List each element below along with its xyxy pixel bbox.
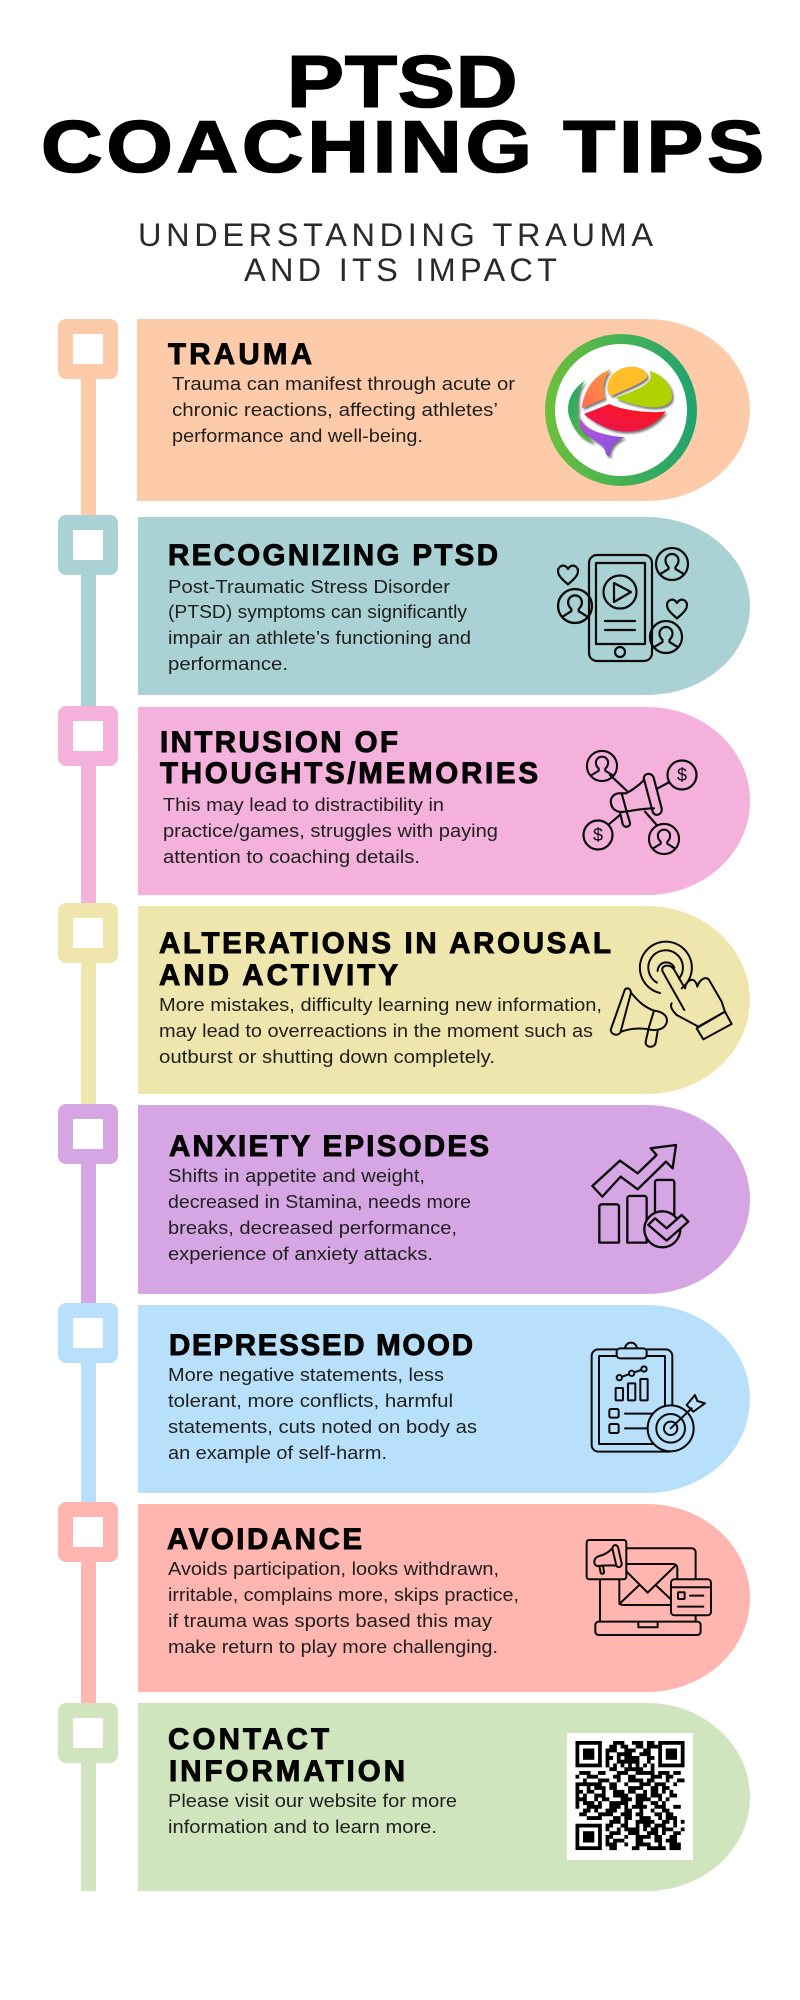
- panel: intrusion of thoughts: [138, 707, 750, 895]
- text: recognizing PTSD: [168, 576, 471, 674]
- timeline marker: arousal: [58, 903, 118, 1108]
- text: contact information: information and to learn more.: [168, 1816, 437, 1837]
- icon: megaphone network: $: [677, 765, 687, 785]
- text: intrusion of thoughts: practice/games, struggles with paying: [163, 820, 498, 841]
- title: COACHING TIPS: [41, 106, 764, 188]
- timeline marker: intrusion: [58, 706, 118, 907]
- heading: alterations in arousal: AND ACTIVITY: [159, 959, 398, 992]
- text: recognizing PTSD: performance.: [168, 653, 288, 674]
- timeline marker: anxiety: [58, 1104, 118, 1307]
- heading: alterations in arousal: [159, 927, 611, 992]
- text: anxiety episodes: [168, 1165, 471, 1264]
- text: alterations in arousal: may lead to overreactions in the moment such as: [159, 1020, 593, 1041]
- text: depressed mood: More negative statements, less: [168, 1364, 444, 1385]
- text: depressed mood: statements, cuts noted on body as: [168, 1416, 477, 1437]
- text: avoidance: irritable, complains more, skips practice,: [168, 1584, 519, 1605]
- panel: alterations in arousal: [138, 906, 750, 1094]
- text: alterations in arousal: [159, 994, 602, 1067]
- QR code: [567, 1733, 693, 1860]
- title: PTSD: [287, 41, 517, 123]
- panel: anxiety episodes: [138, 1105, 750, 1294]
- panel: recognizing PTSD: [138, 517, 750, 695]
- text: anxiety episodes: breaks, decreased performance,: [168, 1217, 457, 1238]
- text: intrusion of thoughts: [163, 794, 498, 867]
- icon: megaphone network: [584, 751, 696, 854]
- text: anxiety episodes: Shifts in appetite and weight,: [168, 1165, 425, 1186]
- timeline marker: trauma: [58, 319, 118, 520]
- text: recognizing PTSD: Post-Traumatic Stress Disorder: [168, 576, 450, 597]
- text: depressed mood: tolerant, more conflicts, harmful: [168, 1390, 453, 1411]
- icon: rising chart with check: [592, 1145, 688, 1247]
- panel: contact information: [138, 1703, 750, 1891]
- heading: alterations in arousal: ALTERATIONS IN AROUSAL: [159, 927, 611, 960]
- text: anxiety episodes: experience of anxiety attacks.: [168, 1243, 433, 1264]
- text: recognizing PTSD: impair an athlete’s functioning and: [168, 627, 471, 648]
- text: alterations in arousal: More mistakes, difficulty learning new information,: [159, 994, 602, 1015]
- text: trauma: chronic reactions, affecting athletes’: [172, 399, 498, 420]
- heading: avoidance: AVOIDANCE: [167, 1523, 362, 1556]
- heading: recognizing PTSD: RECOGNIZING PTSD: [168, 539, 498, 572]
- subtitle: UNDERSTANDING TRAUMA: [138, 217, 653, 253]
- text: recognizing PTSD: (PTSD) symptoms can significantly: [168, 601, 468, 622]
- panel: avoidance: [138, 1504, 750, 1692]
- heading: intrusion of thoughts: [160, 726, 538, 790]
- icon: phone with video and people: [558, 548, 688, 661]
- heading: intrusion of thoughts: THOUGHTS/MEMORIES: [160, 757, 538, 790]
- text: alterations in arousal: outburst or shutting down completely.: [159, 1046, 495, 1067]
- text: contact information: Please visit our website for more: [168, 1790, 457, 1811]
- icon: megaphone network: $: [593, 825, 603, 845]
- text: intrusion of thoughts: attention to coaching details.: [163, 846, 420, 867]
- text: trauma: performance and well-being.: [172, 425, 423, 446]
- text: intrusion of thoughts: This may lead to distractibility in: [163, 794, 444, 815]
- timeline marker: avoidance: [58, 1502, 118, 1706]
- timeline marker: contact: [58, 1703, 118, 1891]
- heading: trauma: TRAUMA: [168, 338, 312, 371]
- heading: depressed mood: DEPRESSED MOOD: [169, 1329, 473, 1362]
- panel: depressed mood: [138, 1305, 750, 1493]
- timeline: [58, 319, 118, 1891]
- icon: clipboard with target: [592, 1343, 705, 1452]
- heading: contact information: INFORMATION: [169, 1755, 405, 1788]
- text: depressed mood: [168, 1364, 477, 1463]
- text: trauma: Trauma can manifest through acute or: [172, 373, 515, 394]
- text: avoidance: Avoids participation, looks withdrawn,: [168, 1558, 499, 1579]
- icon: hand tapping target and megaphone: [611, 942, 732, 1047]
- text: avoidance: [168, 1558, 519, 1657]
- heading: contact information: CONTACT: [168, 1723, 329, 1756]
- heading: anxiety episodes: ANXIETY EPISODES: [169, 1130, 489, 1163]
- icon: laptop with mail and megaphone: [587, 1540, 711, 1635]
- subtitle: AND ITS IMPACT: [244, 252, 557, 288]
- text: anxiety episodes: decreased in Stamina, needs more: [168, 1191, 471, 1212]
- heading: contact information: [168, 1723, 405, 1788]
- timeline marker: recognizing PTSD: [58, 515, 118, 710]
- heading: intrusion of thoughts: INTRUSION OF: [160, 726, 398, 759]
- text: trauma: [172, 373, 515, 446]
- text: depressed mood: an example of self-harm.: [168, 1442, 387, 1463]
- subtitle: [138, 217, 653, 288]
- text: avoidance: make return to play more challenging.: [168, 1636, 498, 1657]
- icon: brain logo: [550, 339, 692, 481]
- panel: trauma: [137, 319, 750, 501]
- text: contact information: [168, 1790, 457, 1837]
- text: avoidance: if trauma was sports based this may: [168, 1610, 493, 1631]
- timeline marker: depressed mood: [58, 1303, 118, 1506]
- title: [41, 41, 764, 188]
